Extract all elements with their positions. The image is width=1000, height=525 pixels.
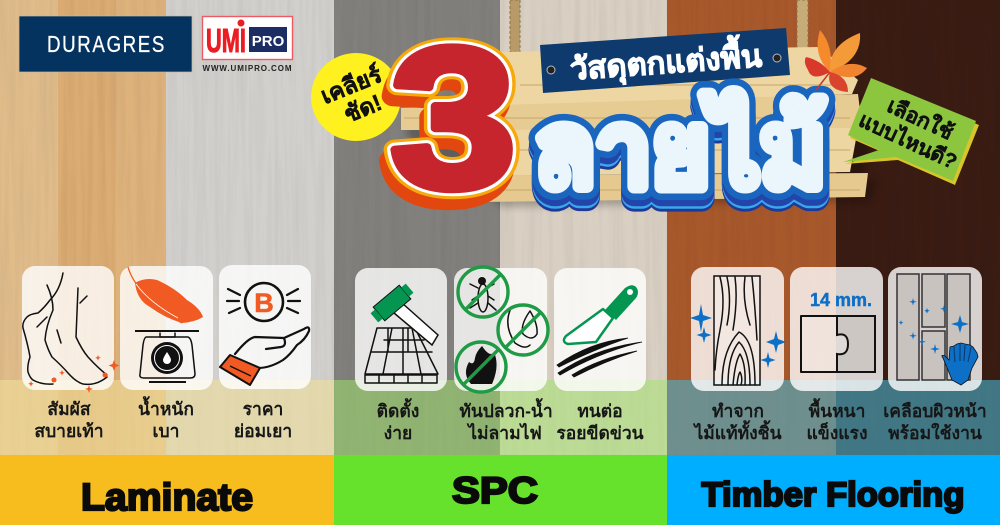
logo: UMI Pro	[202, 16, 292, 73]
label: affordable	[234, 399, 292, 441]
panel: Laminate	[22, 265, 311, 441]
card: thick floor: 14 mm.	[810, 290, 872, 310]
bottom bar: Laminate: Laminate	[81, 477, 253, 519]
logo: UMI Pro: PRO	[252, 33, 285, 50]
main title: ลายไม้: ลายไม้	[534, 100, 826, 218]
icon: no termite	[458, 267, 508, 317]
main title: ลายไม้: ลายไม้	[534, 91, 826, 209]
label: scratch: รอยขีดข่วน	[556, 423, 644, 443]
logo: UMI Pro: WWW.UMIPRO.COM	[202, 64, 292, 73]
badge text: เคลียร์	[317, 61, 386, 109]
bottom bar: Laminate	[0, 455, 334, 525]
label: scratch: ทนต่อ	[577, 401, 623, 421]
big number 3: 3	[385, 18, 512, 241]
icon: no water	[498, 305, 548, 355]
label: termite water proof: ไม่ลามไฟ	[466, 422, 542, 443]
logo: Duragres	[19, 16, 192, 72]
card: pre-finished surface	[888, 267, 982, 391]
label: thick	[806, 398, 868, 443]
colour band: tinted strips	[0, 380, 1000, 455]
card: thick floor	[790, 267, 883, 391]
main title: ลายไม้: ลายไม้	[534, 91, 826, 209]
icon: autumn leaf	[805, 30, 867, 92]
label: comfortable: สบายเท้า	[34, 421, 104, 441]
callout text: แบบไหนดี?	[855, 107, 961, 174]
label: thick: พื้นหนา	[809, 398, 865, 421]
card: termite water fire resistant	[454, 267, 548, 392]
big number 3: 3	[390, 7, 517, 230]
card: light weight	[120, 266, 213, 390]
card: affordable price: B	[254, 288, 274, 318]
navy banner	[540, 28, 790, 93]
label: termite water proof	[459, 398, 553, 443]
label: easy: ติดตั้ง	[377, 398, 419, 421]
rope left	[510, 0, 520, 52]
main title: ลายไม้: ลายไม้	[534, 98, 826, 215]
label: affordable: ย่อมเยา	[234, 421, 292, 441]
label: thick: แข็งแรง	[806, 421, 868, 443]
card: affordable price	[219, 265, 311, 389]
card: comfortable feet	[22, 266, 120, 393]
label: termite water proof: ทันปลวก-น้ำ	[459, 398, 553, 421]
big number 3: 3	[390, 7, 517, 230]
label: easy: ง่าย	[384, 423, 412, 443]
label: solid wood: ทำจาก	[712, 401, 764, 421]
bottom bar: Timber Flooring	[667, 455, 1000, 525]
label: easy	[377, 398, 419, 443]
label: solid wood: ไม้แท้ทั้งชิ้น	[692, 420, 782, 443]
banner title: วัสดุตกแต่งพื้น	[569, 32, 763, 89]
card: solid wood	[690, 267, 786, 391]
badge text: ชัด!	[340, 89, 385, 128]
callout text: เลือกใช้	[884, 93, 957, 145]
main title: ลายไม้: ลายไม้	[534, 103, 826, 220]
label: affordable: ราคา	[243, 399, 283, 419]
card: easy installation	[355, 268, 447, 391]
panel: Timber Flooring	[690, 267, 987, 443]
label: finish: พร้อมใช้งาน	[888, 422, 982, 443]
label: scratch	[556, 401, 644, 443]
bottom bar: Timber Flooring: Timber Flooring	[702, 476, 964, 514]
rope right	[797, 0, 808, 48]
green callout	[843, 78, 979, 185]
card: scratch resistant	[554, 268, 646, 391]
label: light: น้ำหนัก	[138, 396, 194, 419]
bottom bar: SPC: SPC	[452, 470, 538, 511]
label: light: เบา	[153, 421, 179, 441]
bottom bar: SPC	[334, 455, 667, 525]
badge text	[317, 61, 396, 133]
logo: UMI Pro: UMI	[206, 22, 246, 59]
label: finish: เคลือบผิวหน้า	[883, 401, 987, 421]
icon: no fire	[456, 342, 506, 392]
yellow badge	[311, 53, 401, 141]
label: finish	[883, 401, 987, 443]
wooden sign board	[401, 47, 877, 207]
big number 3: 3	[390, 7, 517, 230]
label: comfortable	[34, 399, 104, 441]
label: light	[138, 396, 194, 441]
panel: SPC	[355, 267, 646, 443]
label: solid wood	[692, 401, 782, 443]
label: comfortable: สัมผัส	[47, 399, 91, 419]
logo: Duragres: DURAGRES	[47, 31, 166, 57]
callout text	[855, 84, 972, 174]
